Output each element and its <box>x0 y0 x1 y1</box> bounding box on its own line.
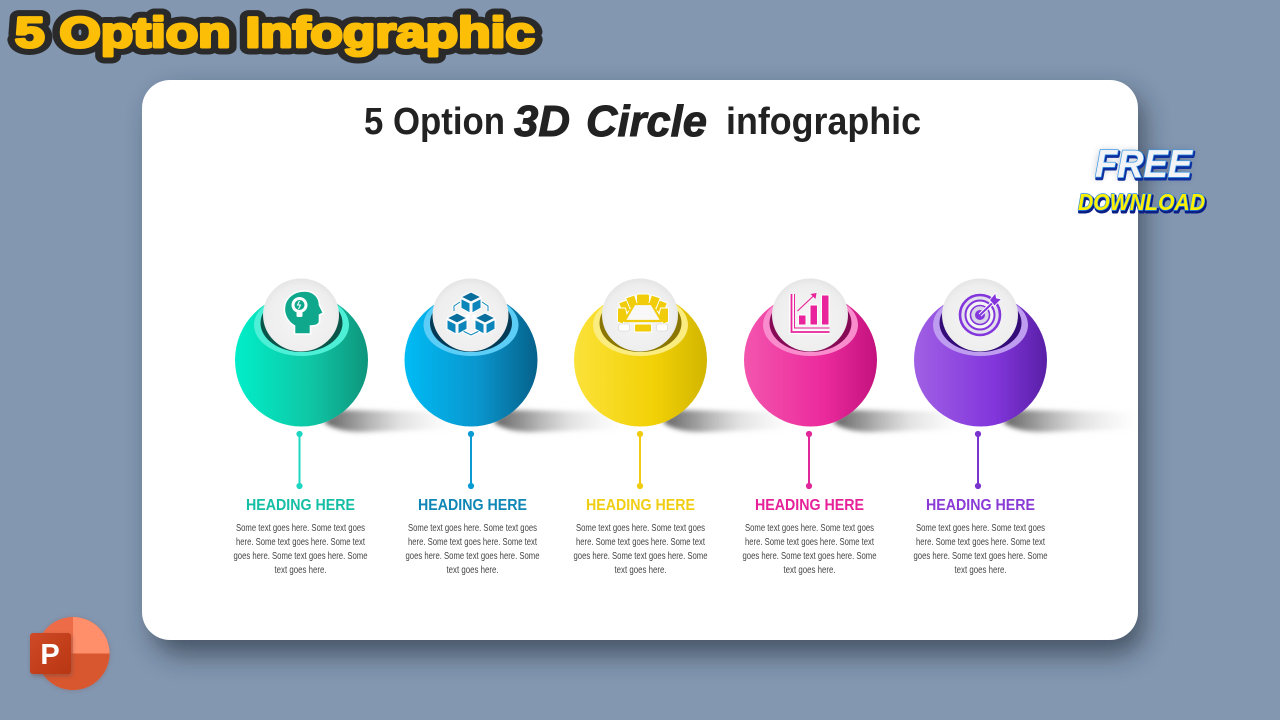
icon: head with light bulb <box>284 291 324 334</box>
text block 3 <box>574 522 708 576</box>
text block 1: text goes here. <box>274 564 326 576</box>
icon: PowerPoint logo: P <box>40 639 60 671</box>
text block 5: Some text goes here. Some text goes <box>916 522 1045 534</box>
heading 3: HEADING HERE <box>586 497 695 514</box>
sphere 2 <box>404 278 623 432</box>
heading 1: HEADING HERE <box>246 497 355 514</box>
text block 5: text goes here. <box>954 564 1006 576</box>
text block 5: here. Some text goes here. Some text <box>916 536 1045 548</box>
text block 3: text goes here. <box>614 564 666 576</box>
text block 1 <box>234 522 368 576</box>
heading 2: HEADING HERE <box>418 497 527 514</box>
connector 4 <box>806 431 812 489</box>
text block 2: Some text goes here. Some text goes <box>408 522 537 534</box>
text block 4: text goes here. <box>784 564 836 576</box>
card heading: 3D <box>514 97 570 146</box>
icon: connected cubes <box>447 292 495 335</box>
title: 5 Option Infographic: 5 Option Infographic <box>15 9 535 57</box>
text block 5 <box>914 522 1048 576</box>
text block 4: goes here. Some text goes here. Some <box>742 550 877 562</box>
sphere 4 <box>744 278 962 432</box>
icon: PowerPoint logo <box>30 617 110 691</box>
text block 3: here. Some text goes here. Some text <box>576 536 705 548</box>
icon: target with arrow <box>960 293 1002 335</box>
text block 4: here. Some text goes here. Some text <box>745 536 874 548</box>
white card panel <box>142 80 1144 655</box>
badge: free download: DOWNLOAD <box>1078 189 1205 215</box>
icon: meeting table <box>618 294 668 332</box>
option 2: blue <box>404 278 623 576</box>
connector 2 <box>468 431 474 489</box>
option 3: yellow <box>574 278 792 576</box>
text block 1: goes here. Some text goes here. Some <box>234 550 368 562</box>
text block 3: Some text goes here. Some text goes <box>576 522 705 534</box>
card heading: infographic <box>726 101 921 143</box>
option 4: pink <box>742 278 962 576</box>
option 1: teal <box>234 278 454 576</box>
heading 5: HEADING HERE <box>926 497 1035 514</box>
card heading: Circle <box>586 97 707 146</box>
text block 2: goes here. Some text goes here. Some <box>406 550 540 562</box>
badge: free download: FREE <box>1095 144 1193 187</box>
text block 5: goes here. Some text goes here. Some <box>914 550 1048 562</box>
option 5: purple <box>914 278 1136 576</box>
badge: free download <box>1078 143 1206 217</box>
connector 1 <box>297 431 302 489</box>
text block 1: Some text goes here. Some text goes <box>236 522 365 534</box>
text block 3: goes here. Some text goes here. Some <box>574 550 708 562</box>
connector 5 <box>975 431 981 489</box>
text block 1: here. Some text goes here. Some text <box>236 536 365 548</box>
heading 4: HEADING HERE <box>755 497 864 514</box>
card heading: 5 Option <box>364 101 505 143</box>
text block 4: Some text goes here. Some text goes <box>745 522 874 534</box>
sphere 1 <box>235 278 454 432</box>
badge: free download: FREE <box>1095 143 1193 186</box>
icon: growth bar chart <box>792 293 830 332</box>
badge: free download: DOWNLOAD <box>1079 191 1206 217</box>
title: 5 Option Infographic: 5 Option Infographic <box>15 9 535 57</box>
text block 2: text goes here. <box>446 564 498 576</box>
text block 2: here. Some text goes here. Some text <box>408 536 537 548</box>
text block 4 <box>742 522 877 576</box>
card heading <box>364 97 921 146</box>
text block 2 <box>406 522 540 576</box>
sphere 3 <box>574 278 792 432</box>
connector 3 <box>637 431 643 489</box>
sphere 5 <box>914 278 1136 432</box>
badge: free download: FREE <box>1096 145 1194 188</box>
